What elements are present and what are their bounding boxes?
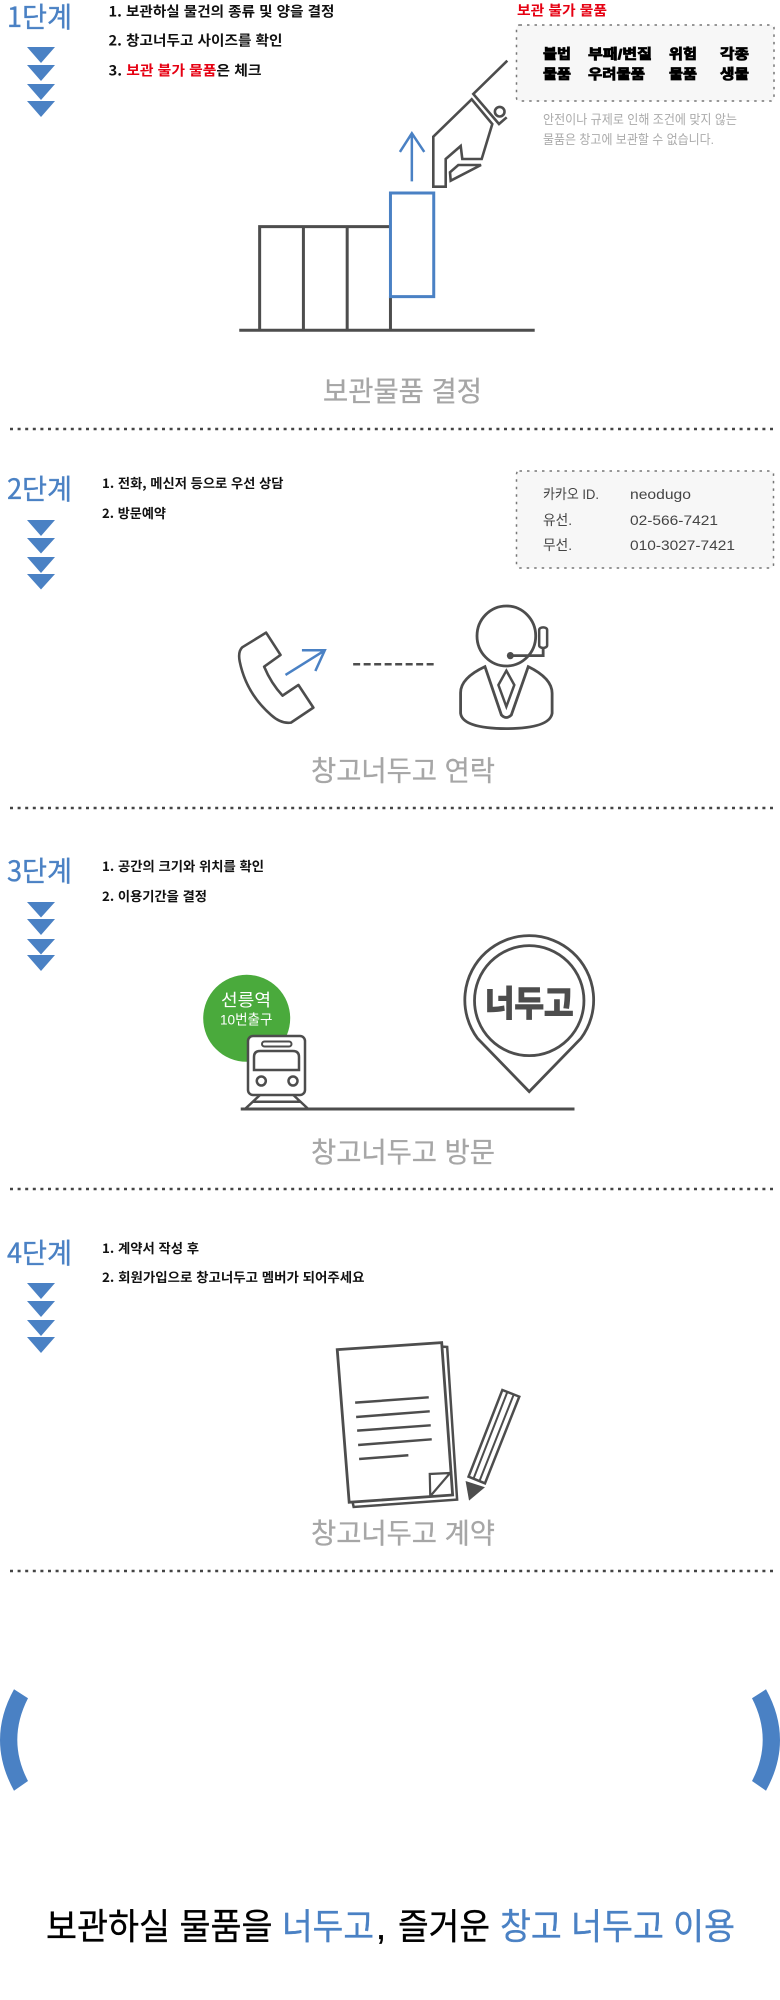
prohibited items note [543, 112, 737, 147]
step 1 caption: 보관물품 결정 [323, 370, 482, 410]
station badge [203, 975, 290, 1062]
panel: prohibited items box: 부패/변질 [588, 46, 652, 62]
icon: location pin [465, 936, 594, 1092]
prohibited items note: 물품은 창고에 보관할 수 없습니다. [543, 132, 714, 147]
panel: contact box [516, 471, 774, 568]
step 4 instructions: 2. 회원가입으로 창고너두고 멤버가 되어주세요 [102, 1267, 365, 1286]
panel: prohibited items box: 물품 [543, 66, 571, 82]
step 2 heading: 2단계 [7, 468, 72, 508]
pin brand text: 너두고 [485, 985, 574, 1024]
icon: hand [433, 61, 507, 187]
panel: prohibited items box: 불법 [543, 46, 571, 62]
step 3 instructions [102, 856, 264, 905]
station badge: 10번출구 [220, 1012, 273, 1028]
prohibited items note: 안전이나 규제로 인해 조건에 맞지 않는 [543, 112, 737, 127]
panel: step 3 [7, 850, 594, 1171]
icon: step 3 down arrows [27, 902, 55, 971]
step 2 instructions [102, 473, 284, 522]
panel: contact box: 무선. [543, 537, 572, 553]
panel: prohibited items box: 물품 [669, 66, 697, 82]
panel: contact box: 02-566-7421 [630, 512, 718, 528]
step 1 instructions [108, 2, 334, 80]
step 3 instructions: 2. 이용기간을 결정 [102, 886, 207, 905]
closing tagline: 보관하실 물품을 [46, 1906, 272, 1947]
panel: prohibited items box: 위험 [669, 46, 697, 62]
icon: step 4 down arrows [27, 1283, 55, 1353]
step 4 instructions [102, 1238, 365, 1286]
step 3 heading: 3단계 [7, 850, 72, 890]
panel: contact box: 카카오 ID. [543, 486, 599, 502]
prohibited items title: 보관 불가 물품 [517, 2, 607, 18]
panel: step 4 [7, 1232, 519, 1552]
illustration: track and location pin [241, 936, 594, 1109]
bracket: left [0, 1689, 28, 1791]
panel: step 2 [7, 468, 774, 790]
panel: contact box: 010-3027-7421 [630, 537, 735, 553]
step 4 caption: 창고너두고 계약 [311, 1512, 495, 1552]
icon: step 2 down arrows [27, 520, 55, 590]
panel: prohibited items box [516, 25, 774, 101]
panel: prohibited items box: 생물 [720, 66, 749, 82]
panel: step 1 [7, 0, 774, 410]
closing tagline: 너두고 [282, 1906, 374, 1947]
station badge: 선릉역 [221, 991, 271, 1010]
closing tagline: 창고 너두고 이용 [500, 1906, 735, 1947]
icon: pencil [466, 1390, 519, 1501]
step 2 caption: 창고너두고 연락 [311, 750, 495, 790]
panel: prohibited items box: 각종 [720, 46, 749, 62]
step 1 instructions: 2. 창고너두고 사이즈를 확인 [108, 30, 282, 50]
step 1 instructions: 3. 보관 불가 물품 은 체크 [108, 60, 262, 80]
icon: contract [337, 1343, 457, 1507]
closing tagline [46, 1906, 735, 1947]
step 2 instructions: 1. 전화, 메신저 등으로 우선 상담 [102, 473, 284, 492]
icon: step 1 down arrows [27, 47, 55, 117]
step 4 heading: 4단계 [7, 1232, 72, 1272]
panel: contact box: neodugo [630, 486, 691, 502]
bracket: right [752, 1689, 780, 1791]
panel: prohibited items box: 우려물품 [588, 66, 645, 82]
closing tagline: , [376, 1906, 386, 1947]
step 3 caption: 창고너두고 방문 [311, 1131, 495, 1171]
step 4 instructions: 1. 계약서 작성 후 [102, 1238, 199, 1257]
illustration: boxes and arrow [239, 133, 535, 330]
panel: contact box: 유선. [543, 512, 572, 528]
icon: phone [239, 633, 313, 723]
illustration: phone and operator [239, 606, 552, 729]
icon: operator [461, 606, 552, 729]
step 3 instructions: 1. 공간의 크기와 위치를 확인 [102, 856, 264, 875]
closing tagline: 즐거운 [398, 1906, 490, 1947]
step 1 instructions: 1. 보관하실 물건의 종류 및 양을 결정 [108, 2, 334, 22]
step 2 instructions: 2. 방문예약 [102, 503, 166, 522]
icon: outgoing arrow [286, 650, 325, 675]
icon: train [245, 1036, 308, 1109]
illustration: contract and pencil [337, 1343, 519, 1507]
